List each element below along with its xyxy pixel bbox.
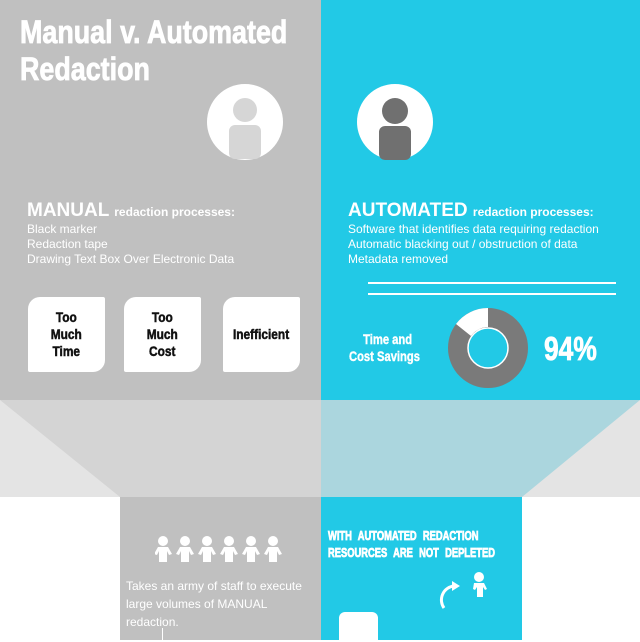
text: automated processes: Software that identifies data requiring redaction: [348, 222, 599, 236]
text: automated processes: Metadata removed: [348, 252, 448, 266]
icon: people row: [155, 536, 282, 562]
text: automated processes: Automatic blacking out / obstruction of data: [348, 237, 577, 251]
text: army of staff: Takes an army of staff to execute large volumes of MANUAL redaction.: [126, 579, 302, 629]
text: manual processes: Black marker: [27, 222, 97, 236]
text: manual processes: [27, 200, 235, 266]
card: too much time: [28, 297, 105, 372]
text: automated processes: AUTOMATED redaction processes:: [348, 200, 594, 221]
panel: automated background: [321, 0, 640, 400]
text: manual processes: Drawing Text Box Over Electronic Data: [27, 252, 234, 266]
panel: manual background: [0, 0, 321, 400]
card: too much cost: Too: [152, 309, 173, 325]
card: inefficient: Inefficient: [233, 326, 290, 342]
card: inefficient: [223, 297, 300, 372]
panel: manual bottom column: [120, 497, 321, 640]
card: too much time: Time: [53, 343, 80, 359]
stat: 94%: 94%: [544, 330, 597, 367]
title: [20, 14, 287, 87]
title: Manual v. Automated: [20, 14, 287, 50]
donut chart: [448, 308, 528, 388]
card: too much cost: Cost: [149, 343, 176, 359]
label: time and cost savings: Cost Savings: [349, 348, 420, 364]
card: too much time: Much: [51, 326, 82, 342]
card: too much cost: Much: [147, 326, 178, 342]
label: time and cost savings: [349, 331, 420, 364]
funnel band: [0, 400, 640, 497]
label: time and cost savings: Time and: [363, 331, 412, 347]
heading: resources not depleted: WITH AUTOMATED REDACTION: [328, 528, 479, 543]
line: [162, 628, 163, 640]
text: manual processes: Redaction tape: [27, 237, 108, 251]
divider lines: [368, 282, 616, 284]
title: Redaction: [20, 51, 150, 87]
panel: automated bottom column: [321, 497, 522, 640]
icon: document shape: [339, 612, 378, 642]
text: automated processes: [348, 200, 599, 266]
heading: resources not depleted: RESOURCES ARE NOT DEPLETED: [328, 545, 495, 560]
icon: manual avatar: [207, 84, 283, 160]
card: too much cost: [124, 297, 201, 372]
heading: resources not depleted: [328, 528, 495, 560]
icon: automated avatar: [357, 84, 433, 160]
card: too much time: Too: [56, 309, 77, 325]
icon: arrow and person: [440, 572, 487, 609]
text: manual processes: MANUAL redaction processes:: [27, 200, 235, 221]
